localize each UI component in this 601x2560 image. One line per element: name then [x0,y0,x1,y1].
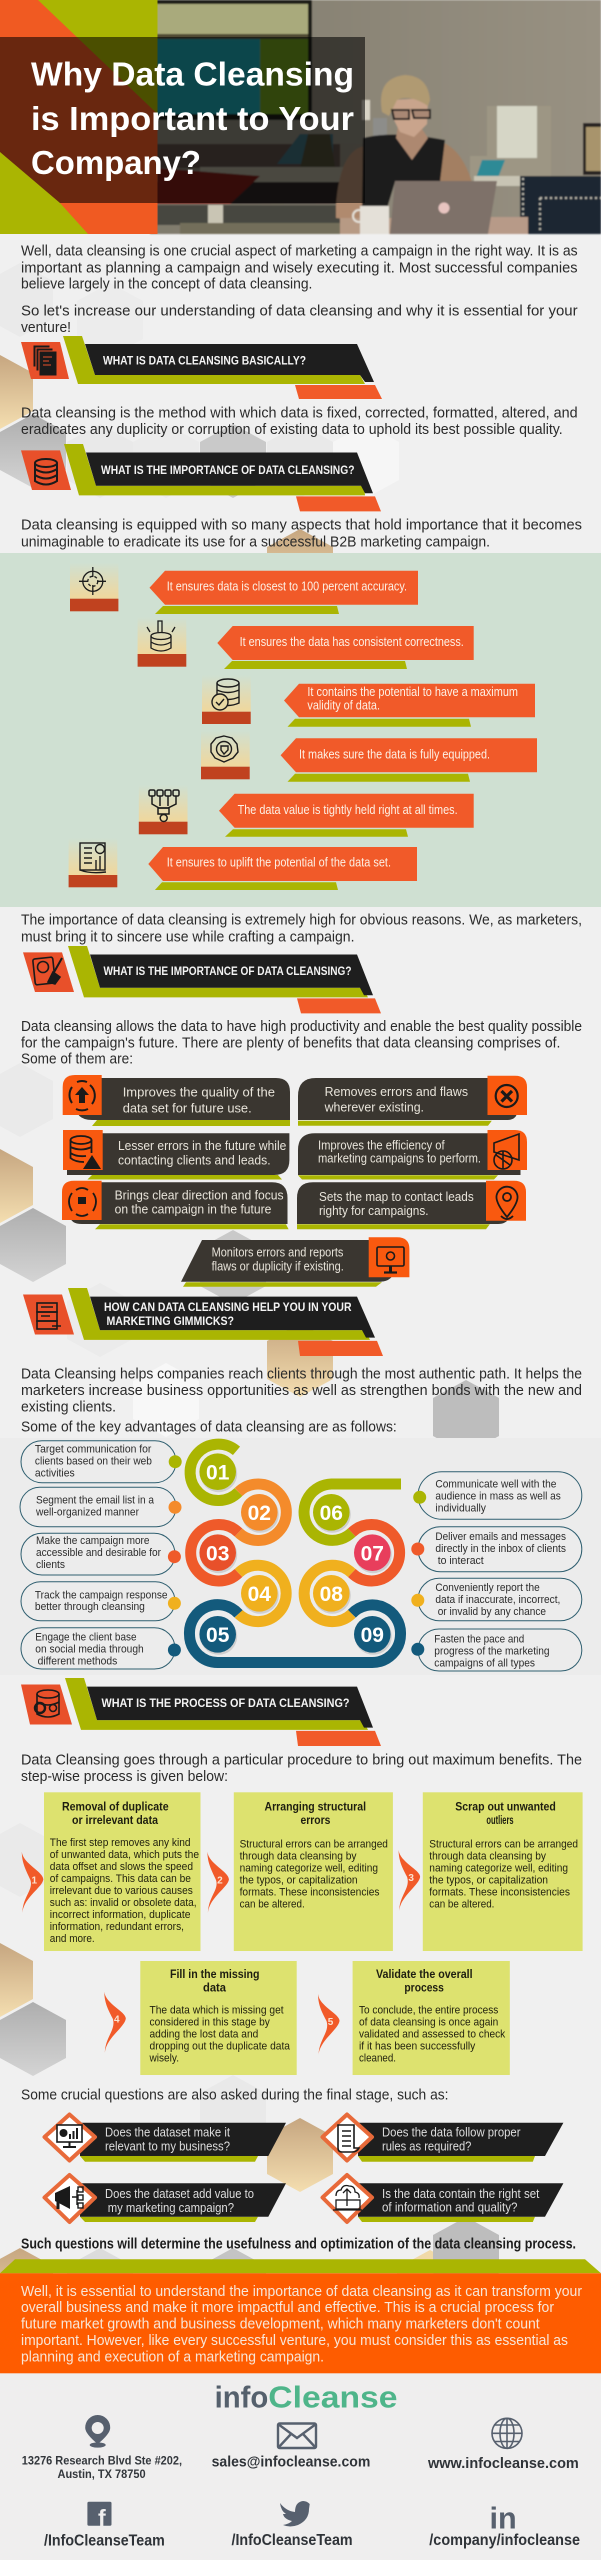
social: linkedin [429,2500,580,2549]
question 1: relevant to my business? [105,2140,230,2154]
title: Company? [31,144,201,181]
question 3: rules as required? [382,2140,471,2154]
question 1 [44,2114,286,2162]
icon: megaphone network [55,2186,83,2209]
question 2 [44,2175,286,2222]
section heading: importance of data cleansing: WHAT IS THE IMPORTANCE OF DATA CLEANSING? [101,463,354,477]
advantage 02: well-organized manner [35,1506,139,1518]
title: Why Data Cleansing [31,55,354,92]
intro text: believe largely in the concept of data cleansing. [21,277,312,293]
logo: infoCleanse: info [215,2380,268,2415]
laptop [390,181,497,234]
benefit: clear direction: Brings clear direction and focus [115,1187,284,1202]
definition text: Data cleansing is the method with which data is fixed, corrected, formatted, altered, and [21,405,578,421]
icon: location pin [85,2415,110,2448]
step 1: information, redundant errors, [50,1921,184,1933]
step 4: considered in this stage by [150,2016,270,2028]
step 1: or irrelevant data [72,1813,158,1827]
step 1: incorrect information, duplicate [50,1909,190,1921]
benefit: lesser errors [63,1130,289,1180]
advantage 07: to interact [438,1555,485,1567]
hero photo: woman at laptop [150,0,601,234]
section heading: how can data cleansing help [23,1288,383,1356]
icon: database gears [35,1690,59,1717]
advantage 08: Conveniently report the [435,1582,540,1594]
step 3: formats. These inconsistencies [429,1886,570,1898]
logo: infoCleanse: Cleanse [268,2380,398,2415]
arrow 5 [318,1994,340,2055]
section heading: process of data cleansing [21,1678,381,1746]
importance text: Data cleansing is equipped with so many aspects that hold importance that it becomes [21,518,582,534]
aspect 3 [202,675,535,727]
aspect 4: It makes sure the data is fully equipped. [299,748,490,762]
benefit: clear direction: on the campaign in the future [115,1201,271,1216]
advantage 04: Track the campaign response [35,1589,168,1601]
conclusion panel: Well, it is essential to understand the importance of data cleansing as it can transform your [21,2284,582,2300]
benefit: improves efficiency: Improves the efficiency of [318,1137,445,1152]
step 5: if it has been successfully [359,2040,476,2052]
step 4: The data which is missing get [150,2004,284,2016]
logo: infoCleanse [215,2380,398,2415]
contact: email: sales@infocleanse.com [212,2454,370,2471]
step 2: Structural errors can be arranged [240,1838,388,1850]
benefit: sets the map: righty for campaigns. [319,1203,428,1218]
wall picture [583,123,601,175]
arrow 2 [207,1852,229,1913]
definition text: eradicates any duplicity or corruption of existing data to uphold its best possible quality. [21,422,563,438]
text: process intro: Data Cleansing goes through a particular procedure to bring out maximum benefits. The [21,1753,582,1769]
title: is Important to Your [31,100,354,137]
arrow 3: 3 [408,1873,414,1884]
icon: server and broom [37,1303,61,1329]
step 5: validated and assessed to check [359,2028,505,2040]
social: linkedin: /company/infocleanse [429,2532,580,2549]
woman [336,146,368,222]
armchair [470,106,551,185]
importance text [21,518,582,551]
benefit: improves efficiency [298,1130,527,1180]
intro text: venture! [21,320,71,336]
advantage 01: clients based on their web [35,1456,152,1468]
advantage 09: Fasten the pace and [434,1634,524,1646]
step 3: Structural errors can be arranged [429,1838,578,1850]
benefit: removes errors: Removes errors and flaws [325,1084,468,1099]
step 3: naming categorize well, editing [429,1862,568,1874]
arrow 3 [399,1850,420,1911]
question 3: Does the data follow proper [382,2126,520,2140]
step 4: wisely. [149,2052,179,2064]
advantage 09: progress of the marketing [434,1646,550,1658]
section heading: process of data cleansing: WHAT IS THE PROCESS OF DATA CLEANSING? [102,1696,350,1710]
benefit: monitors errors: Monitors errors and reports [212,1245,344,1260]
step 3: the typos, or capitalization [429,1874,548,1886]
step 1: Removal of duplicate [62,1800,169,1814]
benefit: improves quality: data set for future use. [123,1100,252,1115]
advantage 06: Communicate well with the [435,1479,556,1491]
step 5: To conclude, the entire process [359,2004,499,2016]
aspect 4 [201,730,537,782]
text: crucial questions intro: Some crucial questions are also asked during the final stage, such as: [21,2087,448,2103]
icon: documents [33,345,57,376]
icon: focus arcs [69,1188,96,1216]
conclusion panel: future market growth and business development, which many marketers don't count [21,2317,540,2333]
icon: verified database [212,679,239,710]
section heading: importance of data cleansing 2: WHAT IS THE IMPORTANCE OF DATA CLEANSING? [104,964,352,978]
text: importance is high: must bring it to sincere use while crafting a campaign. [21,929,354,945]
question 4: of information and quality? [382,2200,517,2214]
question 2: my marketing campaign? [108,2201,234,2215]
arrow 5: 5 [328,2017,334,2028]
contact: website: www.infocleanse.com [427,2455,579,2472]
number circles: 09 [361,1624,384,1647]
step 2: Arranging structural [264,1800,366,1814]
icon: data funnel [149,790,179,822]
step 1: irrelevant due to various causes [50,1885,193,1897]
icon: target [79,567,106,595]
icon: upload cycle [69,1081,95,1110]
social: facebook: /InfoCleanseTeam [44,2532,165,2549]
section heading: importance of data cleansing [21,444,381,511]
section heading: what is data cleansing basically: WHAT IS DATA CLEANSING BASICALLY? [103,354,306,368]
section heading: how can data cleansing help: MARKETING GIMMICKS? [106,1314,234,1328]
contact: website [427,2418,579,2472]
advantage 06: audience in mass as well as [435,1491,561,1503]
step 3: Scrap out unwanted [455,1800,556,1814]
conclusion panel: overall business and make it more impactful and effective. This is a crucial process for [21,2300,554,2316]
question 4: Is the data contain the right set [382,2187,540,2201]
step 3: can be altered. [429,1898,494,1910]
hero banner [0,0,601,234]
icon: rules scroll [338,2125,359,2152]
aspect 1 [70,563,418,614]
aspect 5 [139,785,474,837]
advantage 02 [20,1487,182,1527]
panel: benefits [62,1075,527,1287]
title [31,55,354,181]
intro text: important as planning a campaign and wisely executing it. Most successful companies [21,261,578,277]
advantage 08: data if inaccurate, incorrect, [435,1594,560,1606]
advantage 08 [411,1578,582,1621]
arrow 1 [22,1852,43,1913]
benefit: removes errors [298,1076,527,1126]
benefit: monitors errors: flaws or duplicity if existing. [212,1259,344,1274]
benefit: improves efficiency: marketing campaigns to perform. [318,1151,481,1166]
advantage 03: clients [36,1559,65,1571]
aspect 3: It contains the potential to have a maximum [307,685,518,699]
step 4: adding the lost data and [150,2028,258,2040]
icon: monitor alert [377,1247,404,1272]
benefit: removes errors: wherever existing. [324,1099,424,1114]
advantage 05 [21,1628,181,1669]
intro text: So let's increase our understanding of data cleansing and why it is essential for your [21,303,578,319]
aspect 3: validity of data. [307,698,380,712]
contact: email [212,2424,370,2471]
aspect 2: It ensures the data has consistent correctness. [240,635,464,649]
panel: key advantages [0,1438,601,1675]
icon: database [35,459,57,484]
step 1: of campaigns. This data can be [50,1873,191,1885]
advantage 07 [411,1527,582,1572]
step 5: process [404,1980,444,1994]
benefit: improves quality [63,1075,290,1126]
step 5 [318,1961,510,2075]
aspect 6 [69,838,417,890]
step 1: and more. [50,1933,95,1945]
text: importance is high: The importance of data cleansing is extremely high for obvious reasons. We, as marketers, [21,913,582,929]
advantage 06: individually [435,1503,486,1515]
section heading: what is data cleansing basically [21,336,382,399]
contact: address [22,2415,182,2481]
advantage 06 [413,1472,582,1519]
arrow 4: 4 [114,2015,120,2026]
step 3 [399,1792,583,1951]
definition text [21,405,578,438]
question 4 [322,2175,563,2222]
step 4: data [203,1980,226,1994]
advantage 05: different methods [38,1656,118,1668]
advantage 09: campaigns of all types [434,1658,535,1670]
text: data cleansing helps: Data Cleansing helps companies reach clients through the most authentic path. It helps the [21,1366,582,1382]
advantage 04 [21,1582,181,1621]
section heading: importance of data cleansing 2 [23,946,381,1013]
advantage 08: or invalid by any chance [438,1606,546,1618]
arrow 1: 1 [32,1876,38,1887]
step 2: the typos, or capitalization [240,1874,358,1886]
icon: hard drive and broom [33,957,62,985]
contact: address: Austin, TX 78750 [58,2469,146,2481]
conclusion panel: important. However, like every successful venture, you must consider this as essential as [21,2333,568,2349]
aspect 2 [138,617,474,669]
icon: envelope [278,2424,316,2448]
advantage 02: Segment the email list in a [36,1494,155,1506]
text: benefits intro [21,1019,582,1068]
aspect 6: It ensures to uplift the potential of the data set. [167,856,391,870]
step 5: cleaned. [359,2052,396,2064]
icon: megaphone [494,1134,519,1169]
contact: address: 13276 Research Blvd Ste #202, [22,2455,182,2467]
icon: linkedin: in [490,2500,517,2535]
number circles: 03 [206,1542,229,1565]
colour wedges [0,0,158,234]
social: twitter: /InfoCleanseTeam [232,2532,353,2549]
advantage 04: better through cleansing [35,1601,145,1613]
text: benefits intro: Some of them are: [21,1052,133,1068]
lamp and vase [362,100,370,120]
text: data cleansing helps: Some of the key advantages of data cleansing are as follows: [21,1420,397,1436]
section heading: how can data cleansing help: HOW CAN DATA CLEANSING HELP YOU IN YOUR [104,1300,352,1314]
advantage 01: Target communication for [35,1444,152,1456]
advantage 07: directly in the inbox of clients [435,1543,566,1555]
linked number rings [189,1444,401,1662]
benefit: sets the map [297,1181,526,1229]
text: process intro: step-wise process is given below: [21,1769,228,1785]
advantage 07: Deliver emails and messages [435,1531,566,1543]
icon: facebook: f [98,2505,106,2531]
importance text: unimaginable to eradicate its use for a successful B2B marketing campaign. [21,535,490,551]
icon: globe [492,2418,522,2448]
icon: shield badge [211,736,238,762]
benefit: lesser errors: contacting clients and leads. [118,1152,271,1167]
aspect 1: It ensures data is closest to 100 percent accuracy. [167,580,407,594]
number circles: 07 [361,1542,384,1565]
text: benefits intro: Data cleansing allows the data to have high productivity and enable the best quality possible [21,1019,582,1035]
step 3: outliers [486,1813,514,1827]
text: data cleansing helps: existing clients. [21,1399,116,1415]
step 2: through data cleansing by [240,1850,357,1862]
advantage 03: Make the campaign more [36,1535,150,1547]
social: facebook [44,2502,165,2549]
advantage 03: accessible and desirable for [36,1547,161,1559]
step 4: Fill in the missing [170,1967,260,1981]
advantage 09 [411,1629,582,1671]
step 2: naming categorize well, editing [240,1862,378,1874]
text: data cleansing helps [21,1366,582,1436]
step 2: errors [300,1813,331,1827]
question 2: Does the dataset add value to [105,2187,254,2201]
benefit: lesser errors: Lesser errors in the future while [118,1138,286,1153]
number circles: 08 [320,1583,343,1606]
question 1: Does the dataset make it [105,2126,230,2140]
icon: twitter bird [280,2501,310,2526]
arrow 2: 2 [217,1876,223,1887]
number circles [199,1453,392,1655]
social: twitter [232,2501,353,2549]
number circles: 01 [206,1461,230,1484]
text: importance is high [21,913,582,945]
benefit: clear direction [62,1181,289,1229]
advantage 05: Engage the client base [35,1632,136,1644]
number circles: 04 [248,1583,271,1606]
aspect 5: The data value is tightly held right at all times. [238,803,458,817]
step 1: data offset and slows the speed [50,1861,193,1873]
number circles: 06 [320,1502,343,1525]
mug [360,206,389,234]
step 5: Validate the overall [376,1967,473,1981]
icon: map pin [496,1187,518,1219]
icon: report book [80,843,106,873]
text: benefits intro: for the campaign's future. There are plenty of benefits that data cleansing comprises of. [21,1035,560,1051]
icon: database cleaning [147,621,175,651]
step 1 [22,1792,200,1951]
step 1: The first step removes any kind [50,1837,190,1849]
advantage 05: on social media through [35,1644,144,1656]
benefit: sets the map: Sets the map to contact leads [319,1189,474,1204]
step 2 [207,1792,393,1951]
number circles: 05 [206,1624,230,1647]
step 1: of unwanted data, which puts the [50,1849,199,1861]
step 2: formats. These inconsistencies [240,1886,380,1898]
advantage 01 [21,1441,182,1483]
benefit: monitors errors [181,1237,409,1287]
benefit: improves quality: Improves the quality of the [123,1085,275,1100]
advantage 03 [21,1533,181,1575]
advantage 01: activities [35,1468,75,1480]
question 3 [322,2114,563,2162]
chair [520,176,601,234]
step 3: through data cleansing by [429,1850,546,1862]
step 2: can be altered. [240,1898,305,1910]
icon: cloud data center [333,2186,362,2210]
icon: x in circle [496,1085,518,1107]
intro text [21,244,578,336]
step 4 [104,1961,297,2075]
text: data cleansing helps: marketers increase business opportunities as well as strengthen bonds with the new and [21,1383,582,1399]
conclusion panel: planning and execution of a marketing campaign. [21,2350,324,2366]
arrow 4 [104,1992,126,2053]
intro text: Well, data cleansing is one crucial aspect of marketing a campaign in the right way. It is as [21,244,578,260]
step 4: dropping out the duplicate data [150,2040,291,2052]
number circles: 02 [248,1502,271,1525]
step 1: such as: invalid or obsolete data, [50,1897,197,1909]
text: process intro [21,1753,582,1785]
icon: dashboard monitor [57,2125,82,2147]
step 5: of data cleansing is once again [359,2016,498,2028]
icon: database warning [70,1136,101,1169]
panel: importance aspects [0,553,601,907]
conclusion panel [0,2259,601,2560]
